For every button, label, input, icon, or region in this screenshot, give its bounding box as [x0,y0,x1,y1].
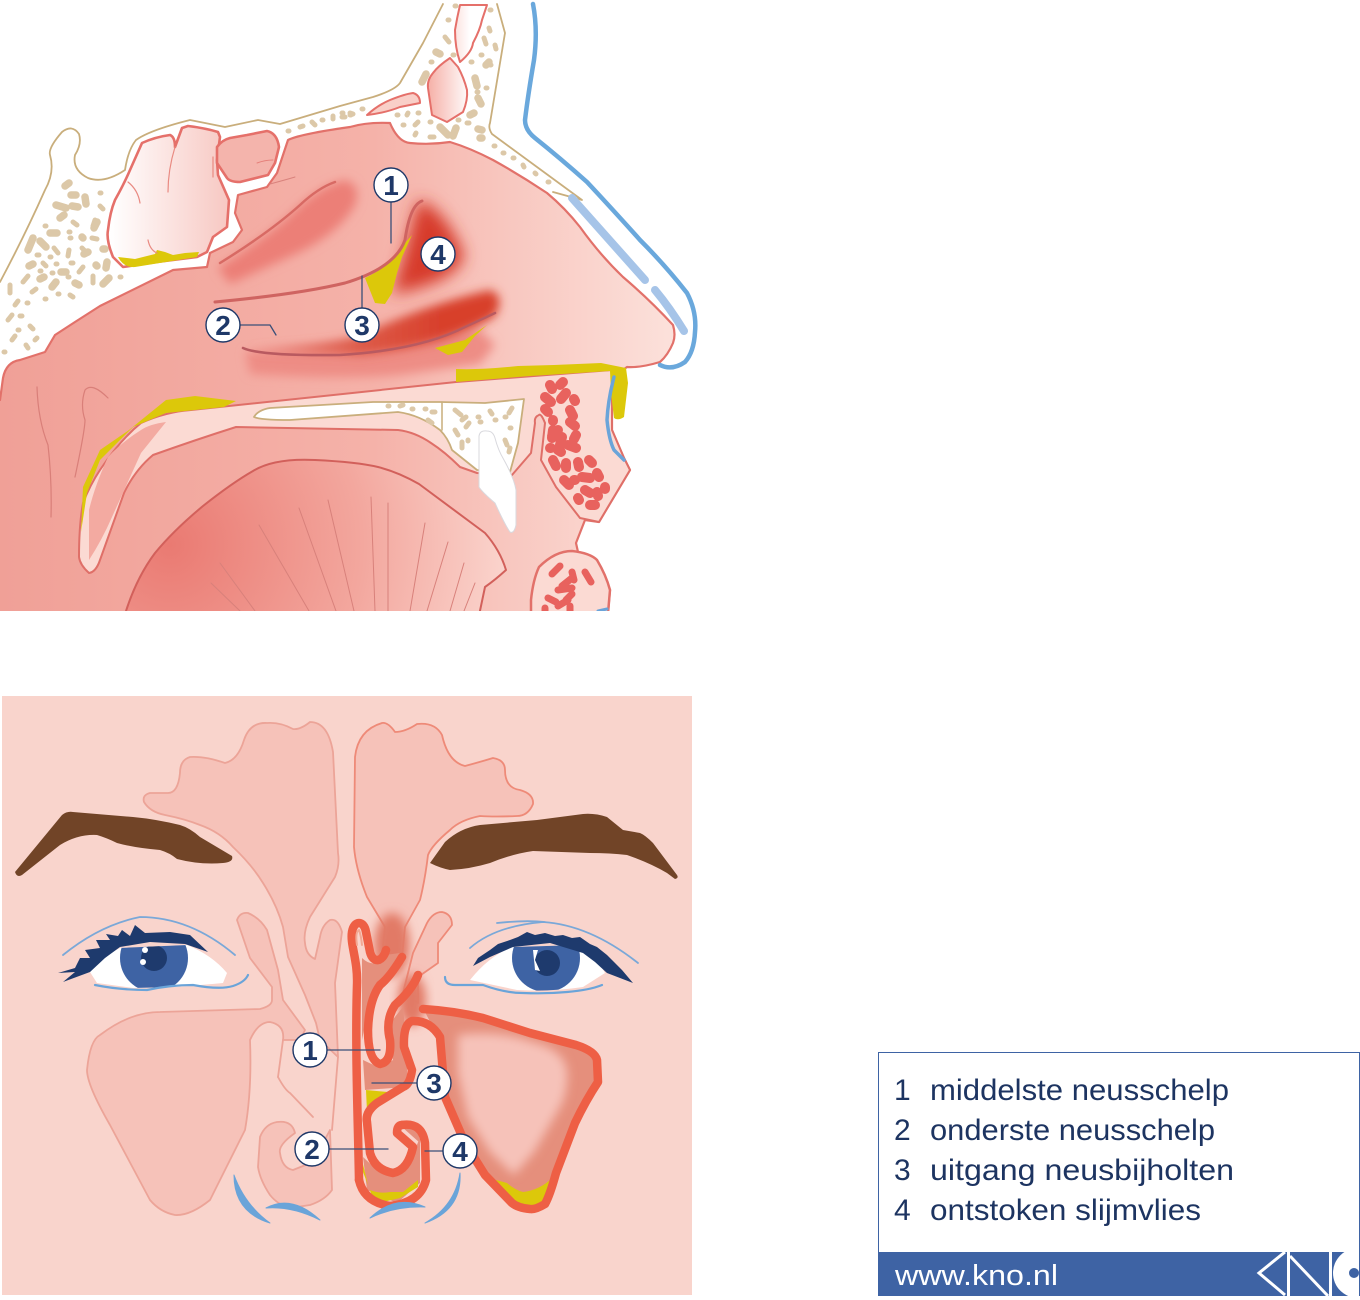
face background [2,696,692,1295]
throat creases [37,387,108,517]
frontal sinus large [428,58,467,122]
skin stub at chin [598,609,607,611]
blush below ethmoid cell [398,974,426,1026]
label: 3: 3 [354,310,370,341]
lower lip [530,550,612,611]
crease behind turbinate [270,177,295,184]
yellow mucus on soft palate [81,396,236,532]
nasal cartilage [572,198,684,331]
soft palate stripe [89,422,166,560]
skin line of lip [607,377,624,460]
frontal sinus small [455,5,487,62]
tongue fibres [211,497,475,611]
label: 3 [345,276,379,342]
left inferior turbinate [258,1122,332,1208]
legend item 3: uitgang neusbijholten [930,1154,1234,1187]
stub highlight [356,930,362,945]
inflamed mucosa outline [352,923,598,1209]
yellow mucus at sinus exit [365,235,412,304]
middle turbinate upper edge [220,182,335,263]
right frontal sinus [354,723,533,957]
yellow mucus in maxillary sinus [485,1177,552,1208]
middle turbinate shading [218,180,357,284]
left eye [58,917,248,992]
panel: side view of the nose [0,4,695,625]
skin line of nose [525,4,695,367]
label: 3: 3 [426,1068,442,1099]
panel: front view of the face [2,696,692,1295]
hard palate divider [441,402,443,430]
right eyebrow [430,814,678,879]
nostril lines [234,1173,460,1223]
right ethmoid cell [403,912,452,1003]
label: 1: 1 [302,1035,318,1066]
legend item 1: middelste neusschelp [930,1074,1229,1107]
hard palate bone [254,399,524,472]
label: 2: 2 [304,1134,320,1165]
legend frame [878,1052,1360,1296]
inflamed area near label four [392,200,464,294]
legend item 2: onderste neusschelp [930,1114,1215,1147]
tooth [479,431,516,532]
skull bone outline [0,4,582,282]
yellow mucus in sphenoid sinus [118,250,199,267]
yellow mucus nostril and lip [456,363,628,419]
label: 2 [295,1132,388,1166]
inferior turbinate inflamed band [250,290,499,355]
label: 1: 1 [383,170,399,201]
yellow mucus on nasal floor [362,1160,418,1202]
label: 3 [372,1066,451,1100]
label: 1 [293,1033,380,1067]
mucosa below middle turbinate [363,1007,407,1090]
footer bar [878,1252,1359,1296]
tongue [126,460,506,625]
frontal sinus narrow [367,93,420,115]
label: 4 [421,237,455,271]
left frontal sinus and central channel [144,722,342,1057]
label: 4: 4 [430,239,446,270]
legend item 4: 4 [894,1194,911,1227]
label: 1 [374,168,408,243]
blush in right frontal sinus [374,913,410,977]
legend item 3: 3 [894,1154,911,1187]
legend item 2: 2 [894,1114,911,1147]
sinus inner creases [128,147,213,253]
website address: www.kno.nl [894,1260,1058,1292]
bone texture [4,6,549,352]
left eyebrow [15,812,232,876]
yellow mucus at sinus exit [366,1090,388,1112]
inferior turbinate line [243,313,495,355]
legend item 4: ontstoken slijmvlies [930,1194,1201,1227]
middle turbinate line [215,201,422,302]
left central channel lines [278,1057,338,1130]
yellow mucus below inferior turbinate [435,325,487,355]
upper lip muscle [545,382,605,505]
posterior sinus crease [257,160,273,163]
left central wall [278,1040,283,1077]
label: 4: 4 [452,1136,468,1167]
sphenoid sinus [108,126,229,267]
posterior sinus [217,131,279,182]
right eye [445,921,638,993]
nasal and oral tissue [0,123,674,625]
left ethmoid and maxillary sinus [87,913,305,1215]
lower lip muscle [545,566,591,612]
panel: legend [878,1052,1360,1298]
inferior turbinate lower fold [245,330,495,377]
KNO logo [1259,1248,1360,1298]
label: 4 [425,1134,477,1168]
mucosa around inferior turbinate [363,1127,420,1203]
label: 2: 2 [215,310,231,341]
maxillary sinus interior [458,1034,567,1175]
ethmoid mucosa [362,953,400,1040]
label: 2 [206,308,276,342]
maxillary sinus [423,1008,600,1211]
legend item 1: 1 [894,1074,911,1107]
palate and lip tissue [79,370,630,573]
hard palate bone texture [388,405,512,452]
